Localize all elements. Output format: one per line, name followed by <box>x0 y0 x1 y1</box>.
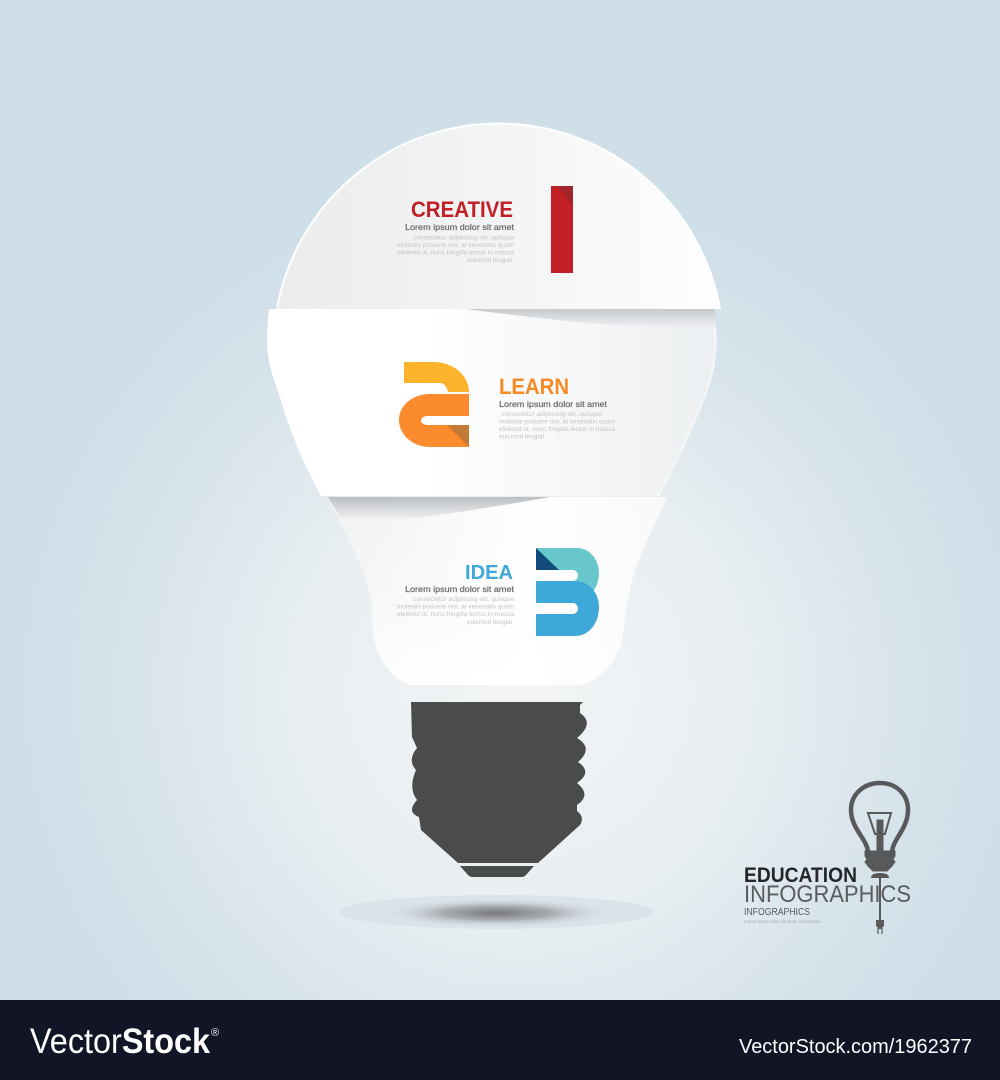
text block: idea <box>397 596 515 626</box>
text block: learn: molestie posuere nisi, at venenatis quam <box>499 418 615 426</box>
footer url: VectorStock.com/1962377 <box>739 1036 972 1058</box>
footer logo: VectorStock <box>30 1022 210 1061</box>
text block: learn: consectetur adipiscing elit. quisque <box>501 411 603 418</box>
subheading: learn: Lorem ipsum dolor sit amet <box>499 399 608 409</box>
text block: idea: euismod feugiat. <box>467 619 514 626</box>
heading: education: EDUCATION <box>744 864 857 887</box>
heading: infographics: INFOGRAPHICS <box>744 881 911 908</box>
bulb screw base <box>411 702 587 877</box>
text block: idea: eleifend ut. nunc fringilla lectus in massa <box>397 611 515 618</box>
number 3 <box>536 548 599 636</box>
text block: learn: euismod feugiat. <box>499 434 546 440</box>
heading: learn: LEARN <box>499 374 569 399</box>
text block: creative <box>397 234 515 264</box>
number 2 <box>399 362 469 447</box>
text block: creative: molestie posuere nisi, at venenatis quam <box>397 242 514 249</box>
fold shadow under top panel <box>465 309 716 327</box>
icon: light bulb <box>851 783 908 934</box>
heading: creative: CREATIVE <box>411 197 513 222</box>
text block: creative: euismod feugiat. <box>467 257 514 264</box>
text block: learn <box>499 411 616 440</box>
subheading: infographics: INFOGRAPHICS <box>744 907 810 918</box>
subheading: creative: Lorem ipsum dolor sit amet <box>405 222 515 232</box>
logo: education infographics <box>744 783 911 934</box>
text block: creative: eleifend ut. nunc fringilla lectus in massa <box>397 250 515 256</box>
panel: bulb middle, learn <box>267 309 716 496</box>
text block: creative: consectetur adipiscing elit. quisque <box>413 234 515 242</box>
fold shadow under middle panel <box>328 497 550 520</box>
text block: idea: molestie posuere nisi, at venenatis quam <box>397 604 514 610</box>
text block: learn: eleifend ut. nunc fringilla lectus in massa <box>499 426 616 433</box>
footer bar <box>0 1000 1000 1080</box>
panel: bulb top, creative <box>277 124 720 309</box>
subheading: idea: Lorem ipsum dolor sit amet <box>405 584 515 594</box>
text block: idea: consectetur adipiscing elit. quisque <box>413 596 515 603</box>
number 1 <box>551 186 573 273</box>
panel: bulb bottom, idea <box>328 497 667 685</box>
caption: Lorem ipsum dolor sit amet, consectetur <box>744 919 821 924</box>
floor shadow <box>340 895 654 929</box>
heading: idea: IDEA <box>465 562 513 584</box>
registered mark: ® <box>211 1027 219 1039</box>
